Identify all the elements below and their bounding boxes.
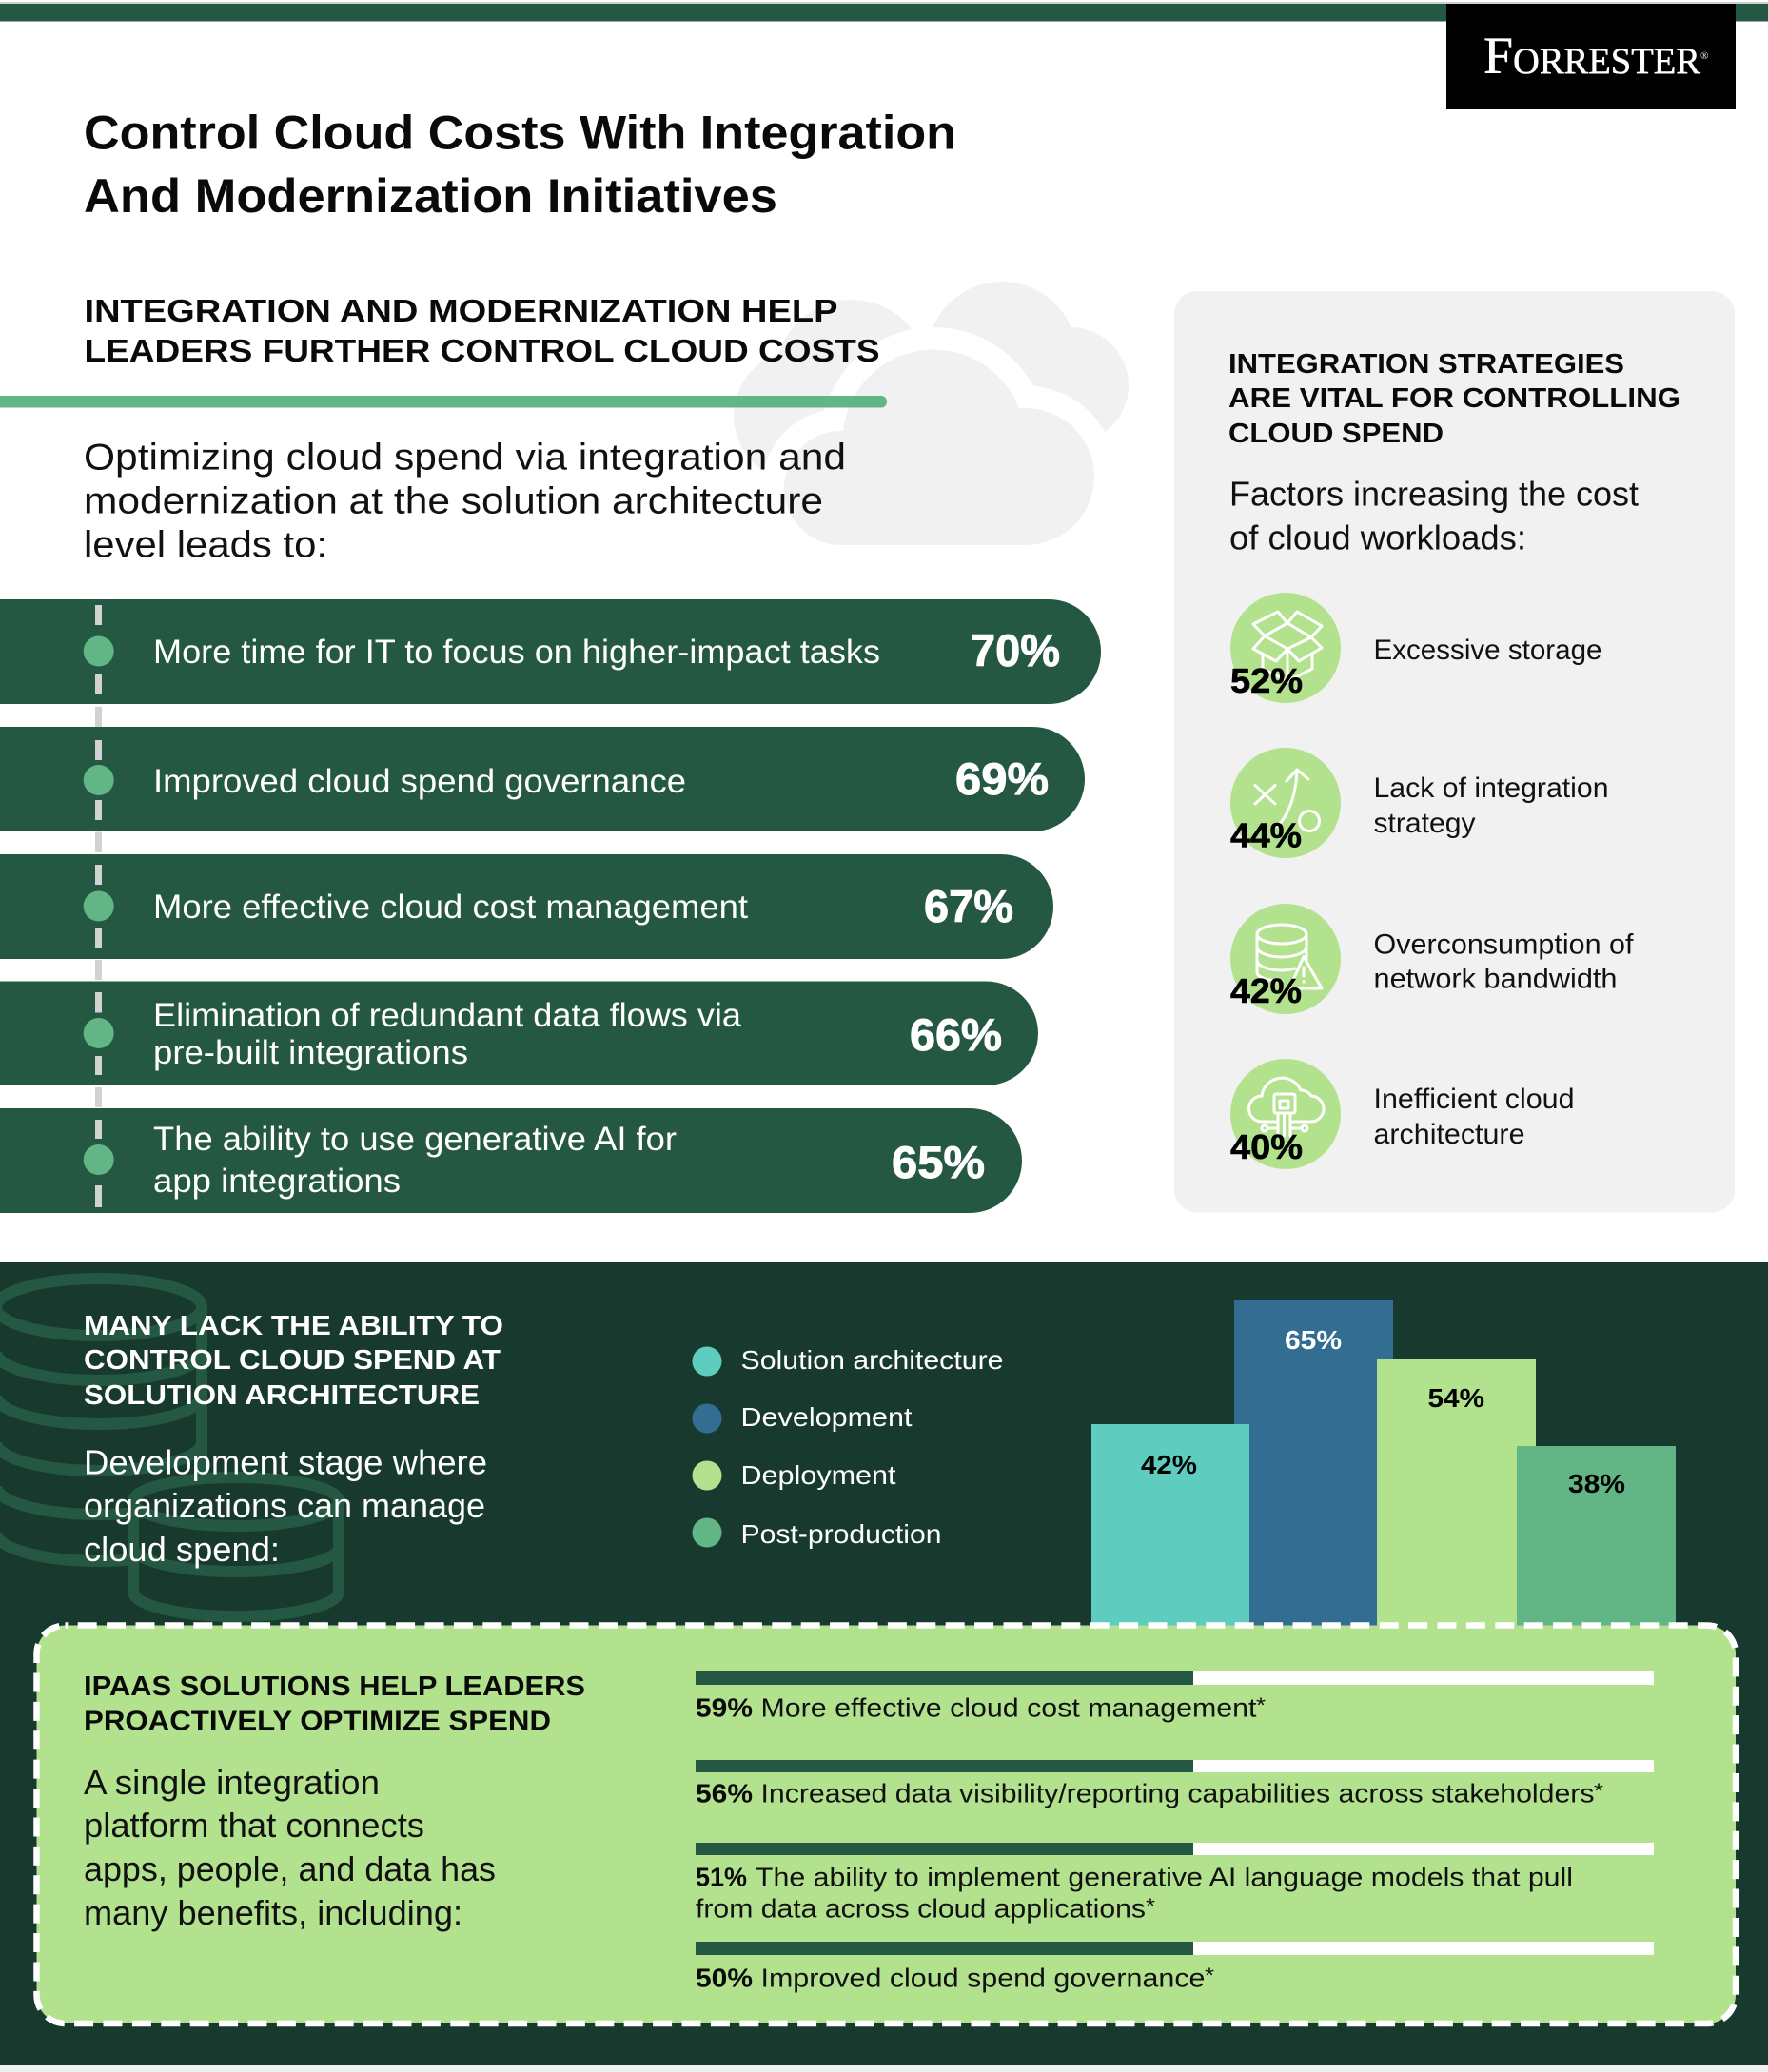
intro text: development stage [84, 1442, 487, 1569]
icon: background databases [0, 1279, 339, 1616]
logo: Forrester [1446, 4, 1736, 109]
factor: inefficient cloud architecture [1230, 1059, 1574, 1169]
bar: 70%: More time for IT to focus on higher-impact tasks [153, 634, 880, 671]
iPaaS intro text: platform that connects [84, 1806, 424, 1845]
panel intro text: Factors increasing the cost [1229, 474, 1639, 514]
factor: overconsumption of network bandwidth: Overconsumption of [1374, 928, 1634, 961]
panel heading [1228, 349, 1680, 449]
benefit: 56%: * [1594, 1779, 1604, 1803]
iPaaS intro text [84, 1763, 496, 1932]
intro text [84, 438, 846, 565]
bar chart: development stages: 54% [1427, 1383, 1484, 1413]
intro text: development stage: Development stage where [84, 1442, 487, 1482]
section heading: many lack the ability: CONTROL CLOUD SPEND AT [84, 1345, 501, 1376]
logo: Forrester: ® [1700, 50, 1708, 62]
panel heading: INTEGRATION STRATEGIES [1228, 349, 1624, 380]
intro text: development stage: cloud spend: [84, 1530, 280, 1569]
factor: lack of integration strategy: 44% [1230, 816, 1302, 854]
title: And Modernization Initiatives [84, 169, 777, 223]
intro text: Optimizing cloud spend via integration and [84, 438, 846, 478]
benefit: 59%: 59% [696, 1693, 753, 1722]
bar: 65%: app integrations [153, 1163, 401, 1200]
bar chart: development stages: 38% [1568, 1469, 1625, 1498]
title: Control Cloud Costs With Integration [84, 107, 956, 160]
panel intro text: of cloud workloads: [1229, 518, 1526, 557]
logo: Forrester: F [1483, 27, 1513, 85]
bar: 65%: The ability to use generative AI for [153, 1121, 677, 1158]
benefit: 51%: * [1146, 1894, 1156, 1918]
chart legend [693, 1345, 1003, 1549]
bar: 66%: 66% [910, 1009, 1002, 1060]
benefit: 50%: * [1205, 1964, 1215, 1987]
panel heading: CLOUD SPEND [1228, 419, 1444, 449]
bar: 69%: Improved cloud spend governance [153, 763, 686, 800]
benefit: 50% [696, 1942, 1654, 1992]
benefit: 51%: 51% [696, 1863, 747, 1891]
benefit: 56%: 56% [696, 1779, 753, 1808]
panel intro text [1229, 474, 1639, 557]
section heading: many lack the ability [84, 1311, 503, 1411]
intro text: modernization at the solution architecture [84, 481, 823, 521]
title [84, 107, 956, 223]
bar: 69% [0, 727, 1085, 831]
bar: 67%: 67% [924, 881, 1013, 931]
chart legend: Development [740, 1402, 913, 1432]
iPaaS intro text: apps, people, and data has [84, 1849, 496, 1888]
icon: background clouds [734, 282, 1129, 545]
timeline dashes and dots [84, 605, 114, 1207]
factor: overconsumption of network bandwidth [1230, 904, 1634, 1014]
bar: 65%: 65% [892, 1137, 985, 1187]
bar chart: development stages: 65% [1285, 1325, 1342, 1355]
green divider bar [0, 396, 887, 407]
benefit: 56% [696, 1760, 1654, 1808]
benefit: 50%: Improved cloud spend governance [761, 1964, 1205, 1992]
benefit: 51%: from data across cloud applications [696, 1893, 1146, 1924]
factor: excessive storage: Excessive storage [1374, 635, 1602, 666]
icon: open box [1253, 612, 1322, 681]
factor: excessive storage: 52% [1230, 661, 1303, 700]
factor: overconsumption of network bandwidth: network bandwidth [1374, 963, 1618, 995]
benefit: 51%: The ability to implement generative AI language models that pull [756, 1863, 1573, 1891]
benefit: 50%: 50% [696, 1964, 753, 1992]
bar: 66%: pre-built integrations [153, 1034, 468, 1071]
benefit: 59%: More effective cloud cost management [761, 1693, 1257, 1722]
logo: Forrester: ORRESTER [1513, 41, 1700, 82]
section heading: many lack the ability: SOLUTION ARCHITECTURE [84, 1380, 480, 1411]
panel heading: ARE VITAL FOR CONTROLLING [1228, 383, 1680, 414]
section heading: integration and modernization: LEADERS FURTHER CONTROL CLOUD COSTS [84, 333, 879, 368]
benefit: 59% [696, 1671, 1654, 1722]
factor: inefficient cloud architecture: 40% [1230, 1127, 1303, 1166]
bar: 66% [0, 982, 1038, 1085]
factor: lack of integration strategy: Lack of integration [1374, 772, 1608, 804]
benefit: 59%: * [1256, 1693, 1267, 1717]
bar: 70% [0, 599, 1101, 704]
chart legend: Post-production [740, 1519, 942, 1549]
iPaaS intro text: many benefits, including: [84, 1893, 462, 1932]
factor: inefficient cloud architecture: architecture [1374, 1119, 1524, 1150]
section heading: integration and modernization [84, 293, 879, 368]
iPaaS intro text: A single integration [84, 1763, 380, 1802]
factor: overconsumption of network bandwidth: 42% [1230, 971, 1302, 1010]
bar: 67%: More effective cloud cost management [153, 889, 748, 926]
factor: excessive storage [1230, 593, 1602, 703]
bar: 69%: 69% [955, 753, 1049, 804]
bars: benefits list [0, 599, 1101, 1213]
icon: database warning [1257, 925, 1322, 988]
section heading: integration and modernization: INTEGRATION AND MODERNIZATION HELP [84, 293, 838, 328]
bar: 66%: Elimination of redundant data flows via [153, 997, 742, 1034]
top banner [0, 2, 1768, 21]
iPaaS heading [84, 1671, 585, 1737]
section heading: many lack the ability: MANY LACK THE ABILITY TO [84, 1311, 503, 1341]
factor: inefficient cloud architecture: Inefficient cloud [1374, 1084, 1574, 1115]
panel: integration strategies [1174, 291, 1735, 1212]
bar: 65% [0, 1108, 1022, 1213]
benefit: 51% [696, 1843, 1654, 1924]
intro text: development stage: organizations can manage [84, 1486, 485, 1525]
bar chart: development stages: 42% [1141, 1450, 1197, 1479]
bar: 67% [0, 854, 1053, 959]
chart legend: Solution architecture [740, 1345, 1003, 1375]
benefit: 56%: Increased data visibility/reporting capabilities across stakeholders [761, 1779, 1595, 1808]
factor: lack of integration strategy: strategy [1374, 808, 1475, 839]
chart legend: Deployment [740, 1460, 896, 1490]
icon: cloud chip [1248, 1078, 1324, 1136]
panel: dark section [0, 1262, 1768, 2065]
intro text: level leads to: [84, 525, 327, 565]
bar chart: development stages [1091, 1300, 1676, 1629]
panel: iPaaS solutions [36, 1625, 1736, 2023]
bar: 70%: 70% [971, 625, 1060, 675]
bottom strip [0, 2065, 1768, 2072]
factor: lack of integration strategy [1230, 748, 1608, 858]
icon: strategy play [1255, 770, 1319, 831]
iPaaS heading: IPAAS SOLUTIONS HELP LEADERS [84, 1671, 585, 1702]
iPaaS heading: PROACTIVELY OPTIMIZE SPEND [84, 1707, 551, 1737]
